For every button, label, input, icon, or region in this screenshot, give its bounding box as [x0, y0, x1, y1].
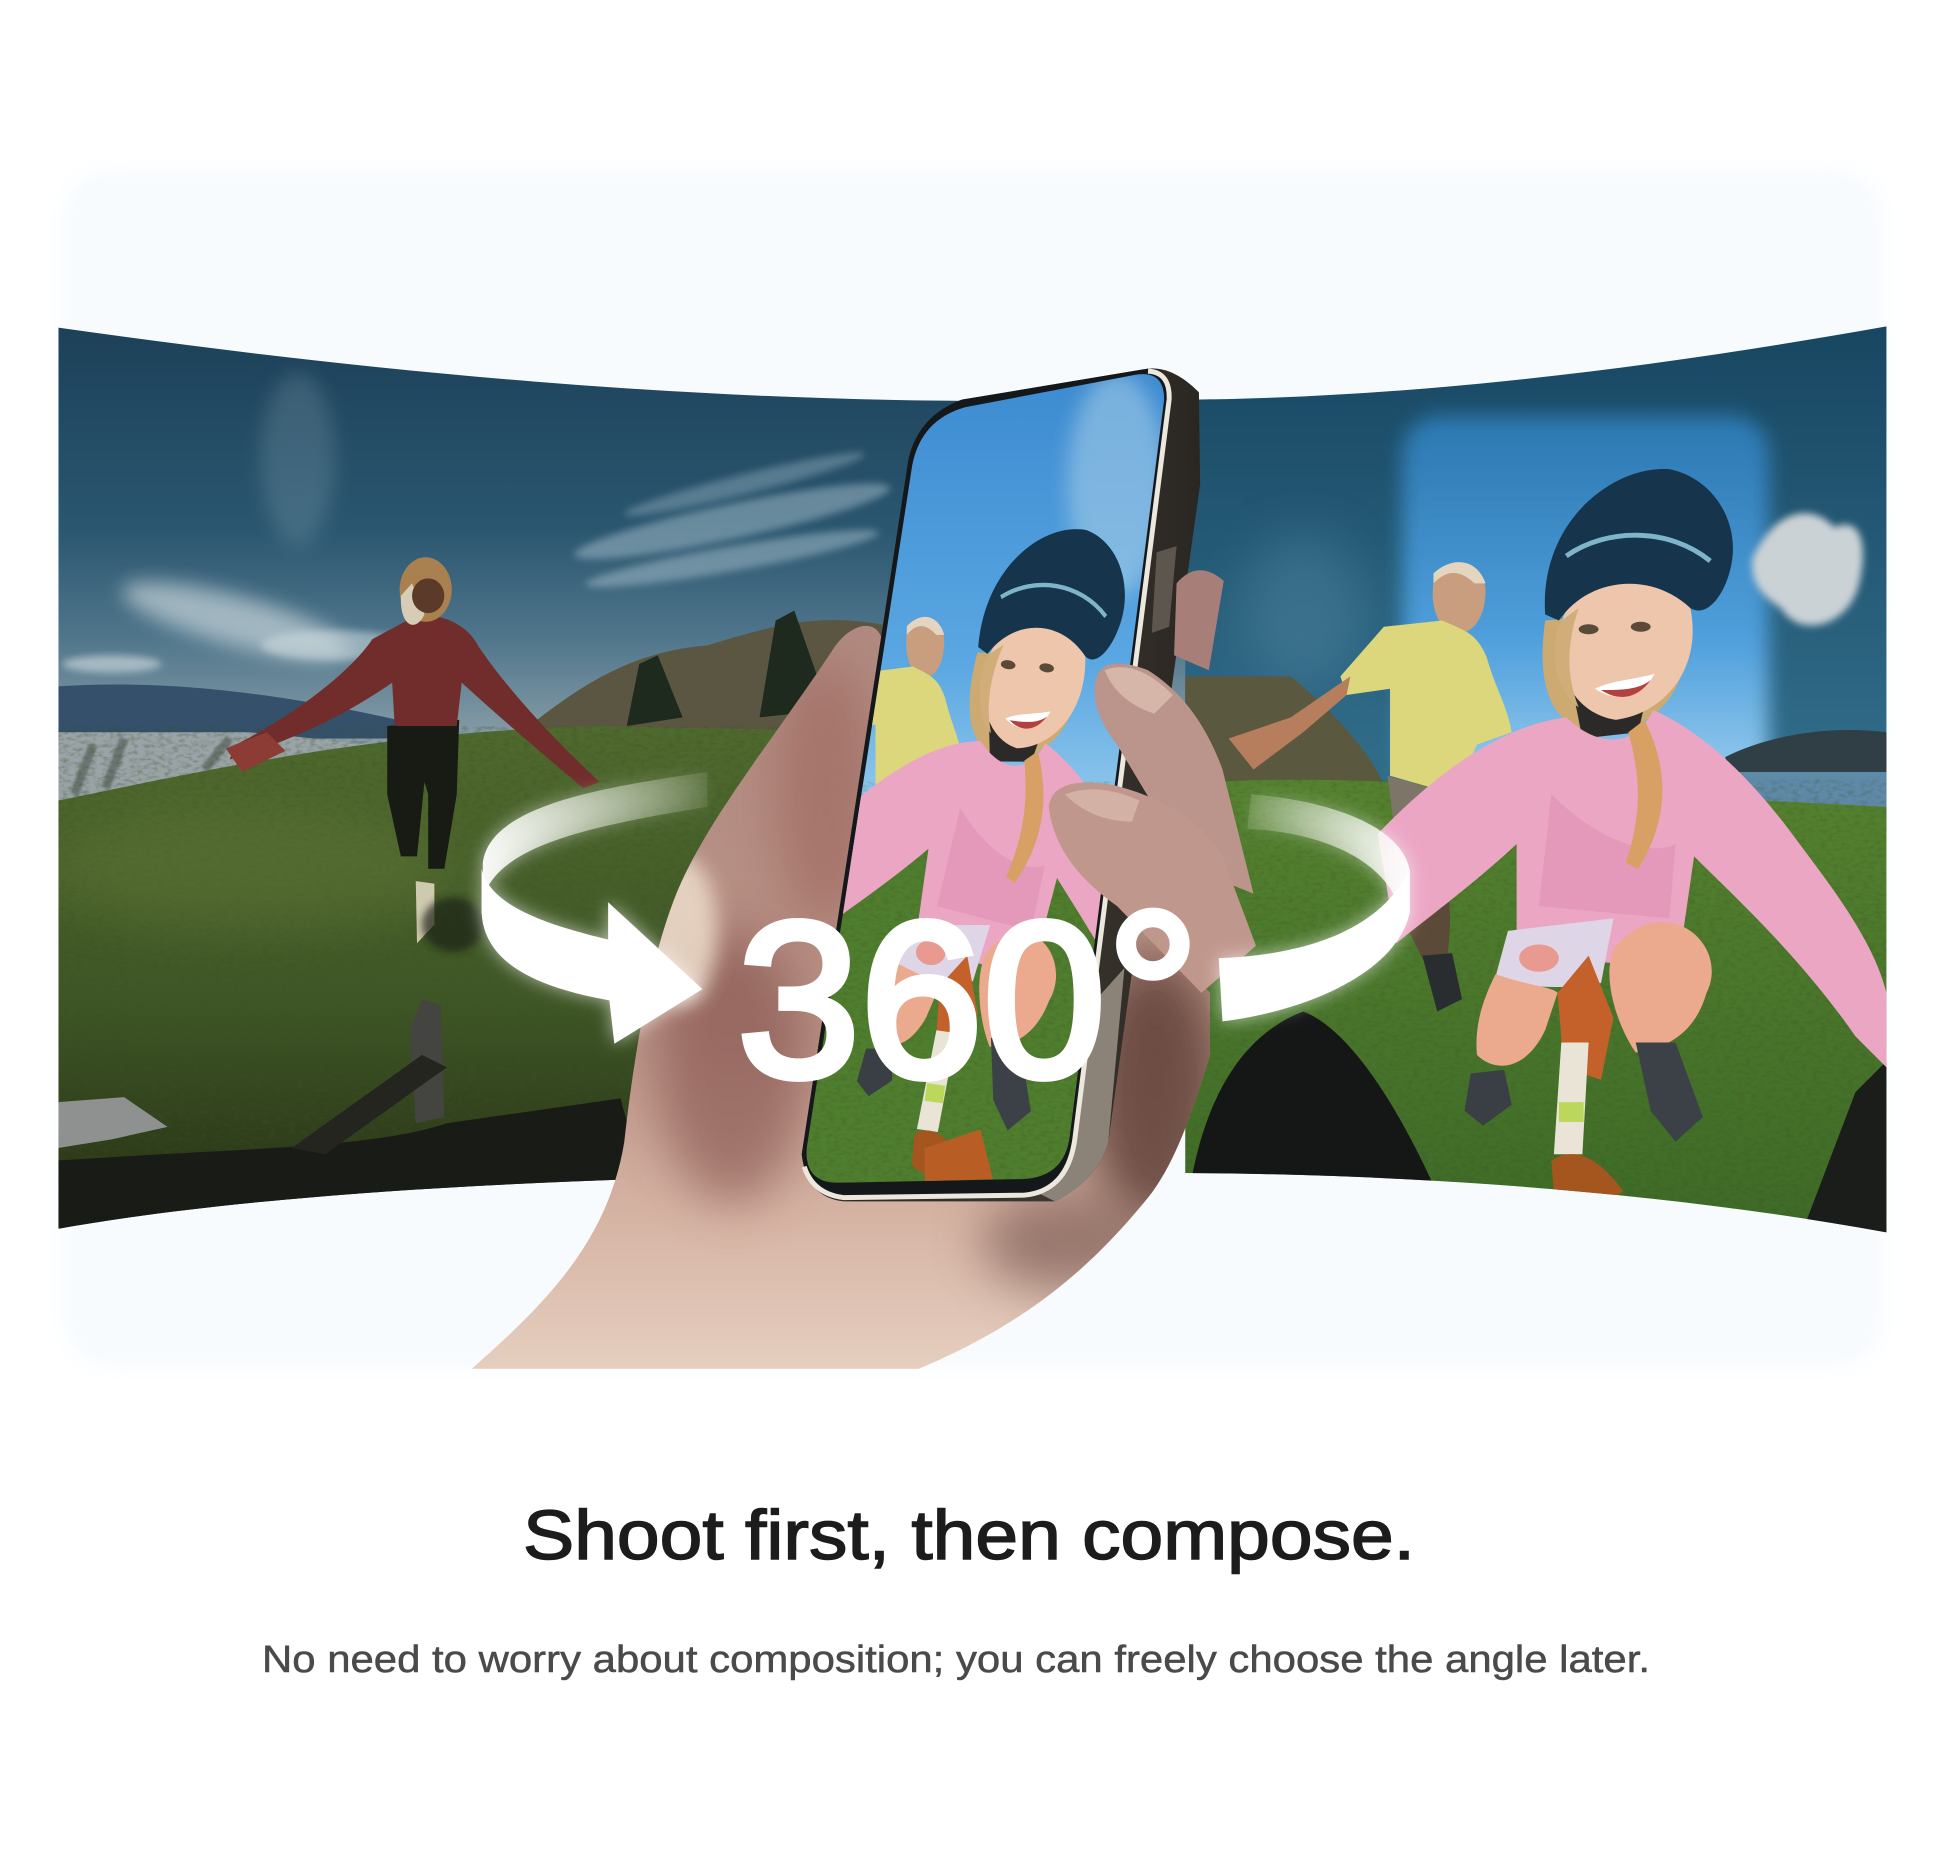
hand: fingers	[1049, 570, 1256, 993]
infographic canvas	[58, 326, 1886, 1680]
rotation arrow: right	[1219, 794, 1410, 1021]
subheading: No need to worry about composition; you can freely choose the angle later.	[262, 1639, 1650, 1681]
handlebars and tyre	[58, 999, 645, 1229]
pale backdrop	[62, 168, 1884, 1369]
child instance	[1378, 469, 1886, 1203]
phone screen	[806, 374, 1164, 1183]
panel: curved 360 panorama	[37, 310, 1893, 1241]
rotation arrow: left	[482, 772, 707, 1044]
side buttons	[1152, 546, 1177, 633]
360 degree label: 360°	[737, 863, 1200, 1126]
hand: palm and thumb	[465, 608, 1222, 1371]
phone	[802, 368, 1200, 1202]
dad legs	[1410, 902, 1462, 1012]
grass	[1185, 780, 1886, 1241]
cloud	[1752, 513, 1863, 625]
hills	[538, 620, 883, 730]
bike foreground	[1191, 1011, 1886, 1241]
hero illustration	[58, 326, 1886, 1369]
distant mountains	[58, 684, 397, 738]
heading: Shoot first, then compose.	[523, 1496, 1415, 1574]
shoreline and lake	[1725, 730, 1886, 776]
grass	[58, 726, 777, 1229]
woman	[226, 557, 599, 952]
phone body	[802, 368, 1200, 1201]
right scene: child on the bike	[1185, 310, 1893, 1241]
lake	[58, 732, 362, 800]
dad instance	[1228, 562, 1512, 818]
left scene: woman on the hill	[37, 310, 1213, 1229]
